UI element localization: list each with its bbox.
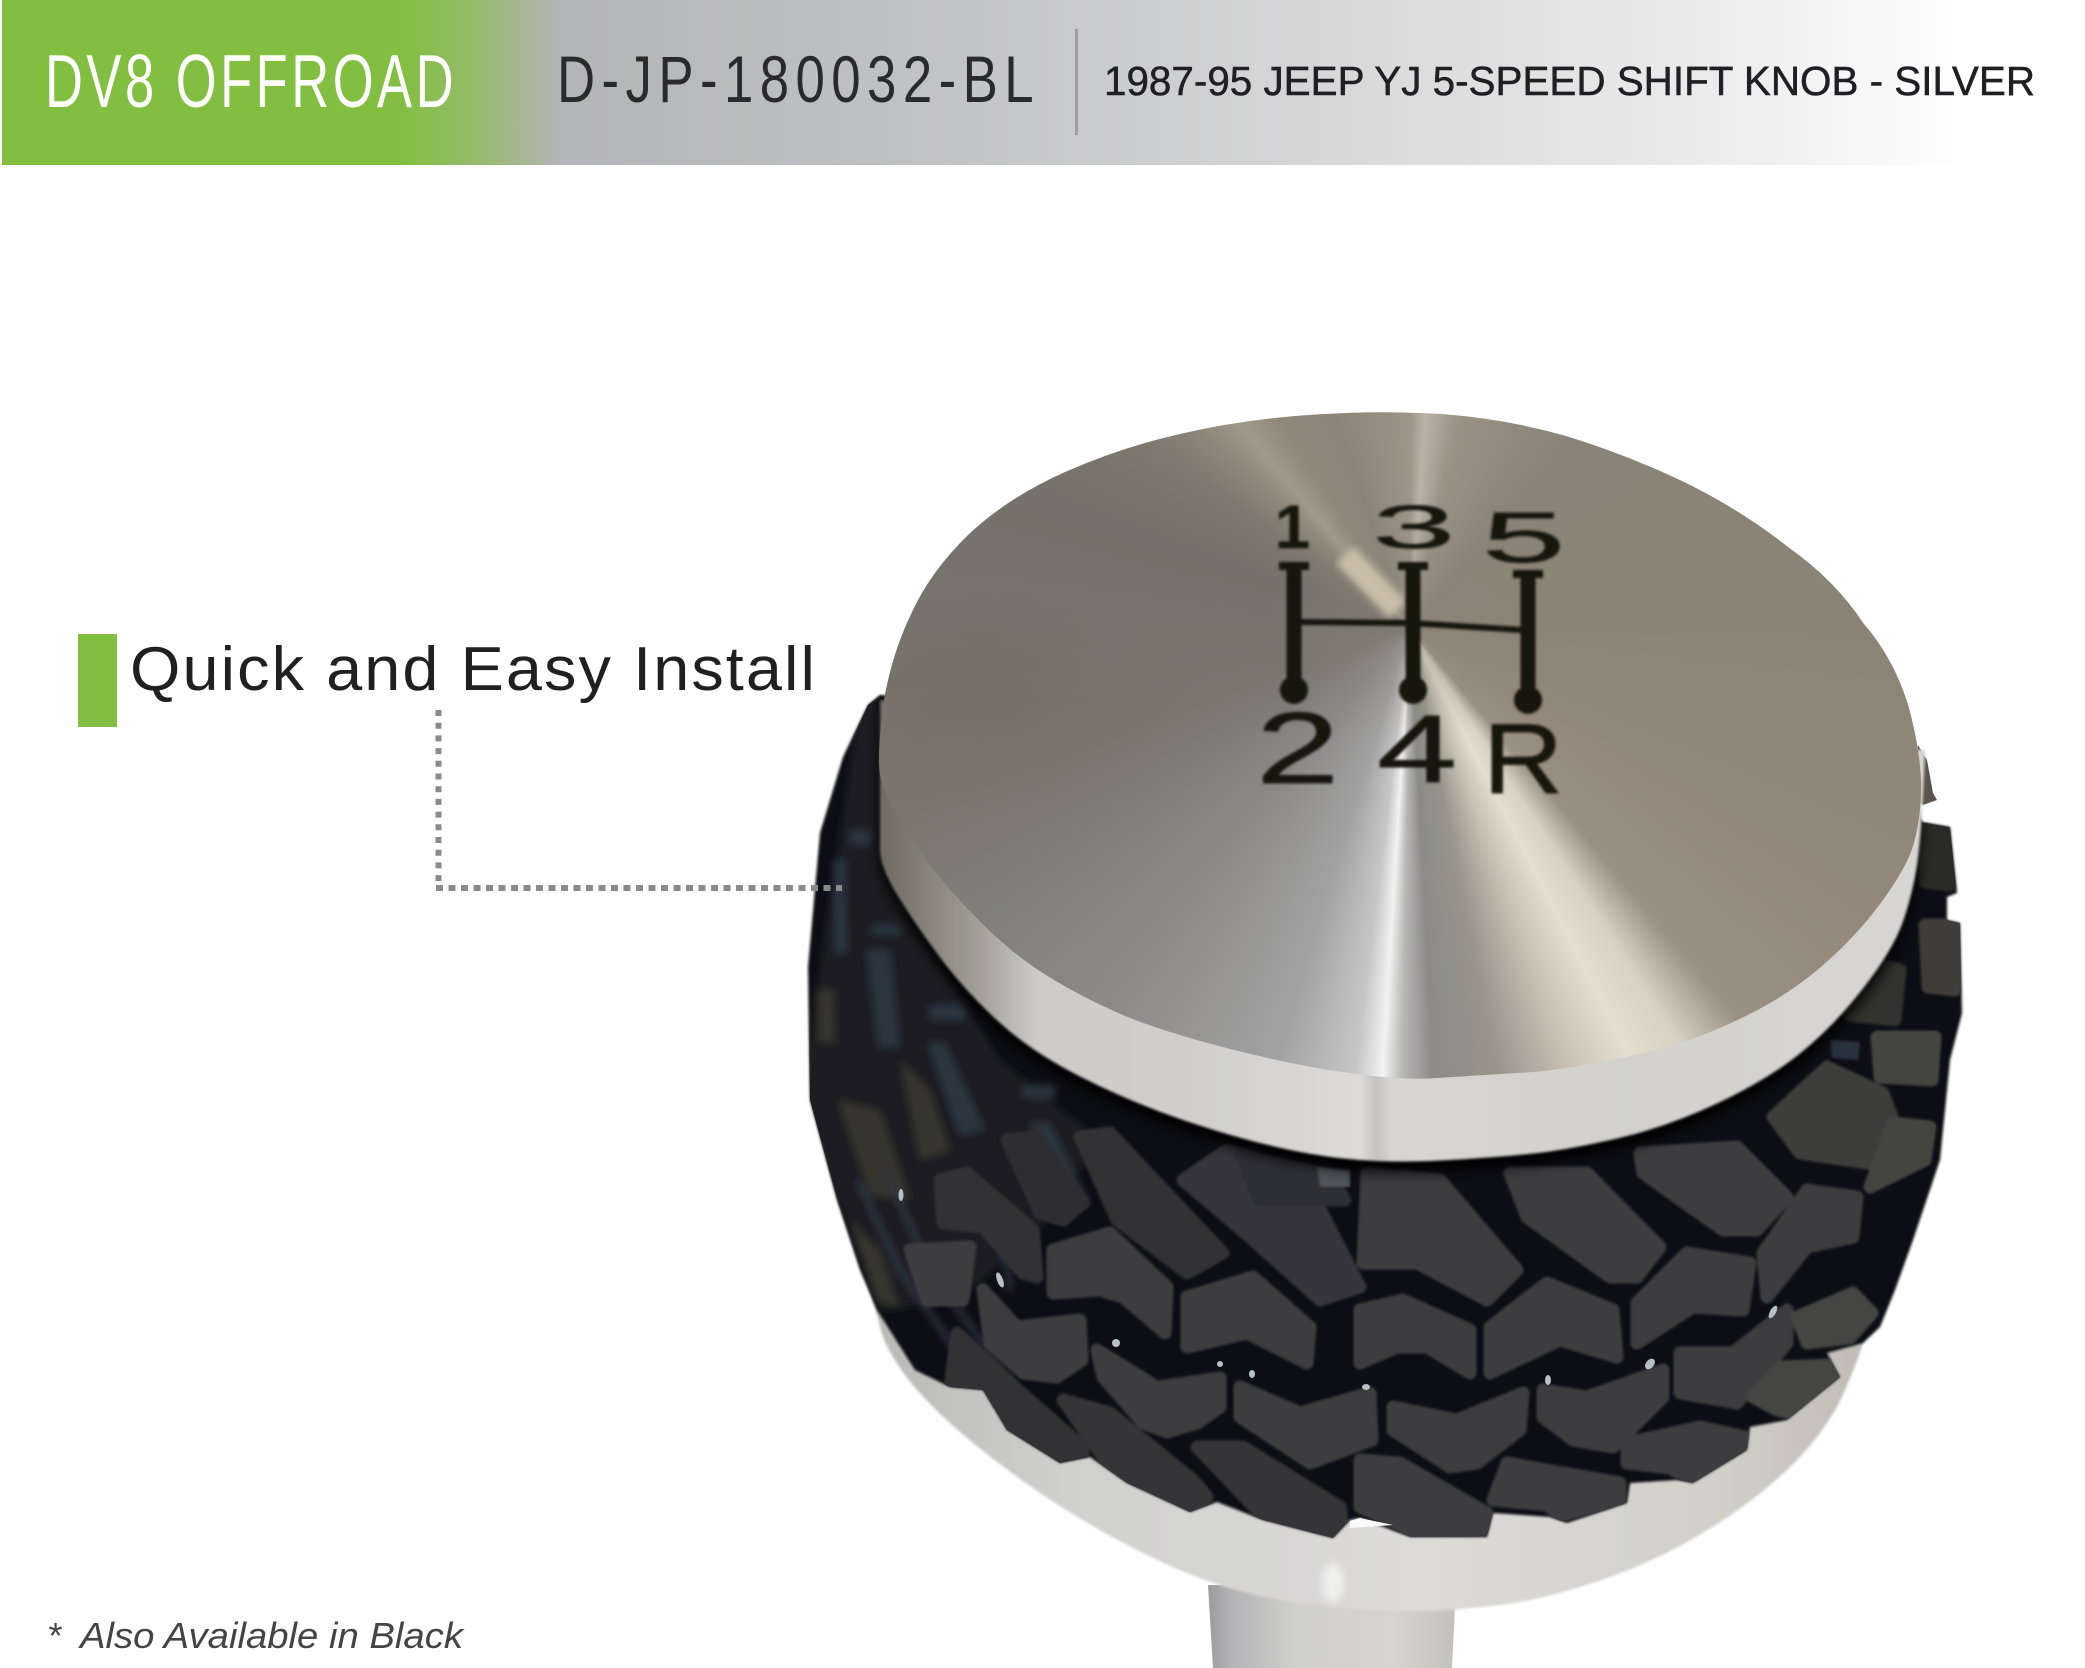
callout text: Quick and Easy Install	[130, 635, 817, 704]
gear numbers: 3	[1372, 493, 1455, 561]
product photo: shift knob	[806, 412, 1964, 1668]
blue-black side wall	[808, 696, 1091, 1374]
gear numbers	[1256, 493, 1565, 815]
H gate lines	[1279, 565, 1543, 705]
green marker	[78, 634, 117, 727]
bluish highlight patches	[1317, 1167, 1350, 1187]
part number: D-JP-180032-BL	[557, 42, 1040, 116]
tire tread	[800, 695, 1962, 1538]
knob body, stem and tire tread	[806, 693, 1964, 1668]
callout: Quick and Easy Install	[78, 634, 842, 891]
gear numbers: 1	[1275, 494, 1310, 562]
glints on tread	[898, 1189, 1779, 1390]
knob lower body	[870, 1290, 1870, 1611]
shadow beneath rim	[880, 700, 1925, 1172]
divider	[1075, 29, 1078, 135]
gear numbers: 4	[1377, 695, 1457, 802]
highlight on body	[1322, 1563, 1344, 1603]
edge nub beside disc	[1915, 745, 1937, 805]
product title: 1987-95 JEEP YJ 5-SPEED SHIFT KNOB - SILVER	[1104, 58, 2035, 104]
footnote: *	[47, 1615, 62, 1656]
footnote: Also Available in Black	[78, 1615, 465, 1656]
right blocks	[1393, 1393, 1523, 1467]
upper slanted blocks	[1007, 1137, 1083, 1220]
lower-left blocks	[983, 1290, 1082, 1377]
header band	[2, 0, 2085, 165]
metal rim	[880, 700, 1925, 1162]
tread blocks	[910, 830, 1955, 1537]
gear numbers: 2	[1256, 692, 1339, 805]
dotted leader line	[436, 710, 842, 888]
gear numbers: 5	[1482, 498, 1565, 577]
brushed metal top disc	[860, 400, 1940, 1100]
brushed streak near centre	[1345, 555, 1398, 610]
white glint under tread	[1350, 1518, 1393, 1528]
shifter stem	[1208, 1585, 1456, 1668]
brand name: DV8 OFFROAD	[45, 39, 457, 123]
gear numbers: R	[1483, 705, 1563, 815]
